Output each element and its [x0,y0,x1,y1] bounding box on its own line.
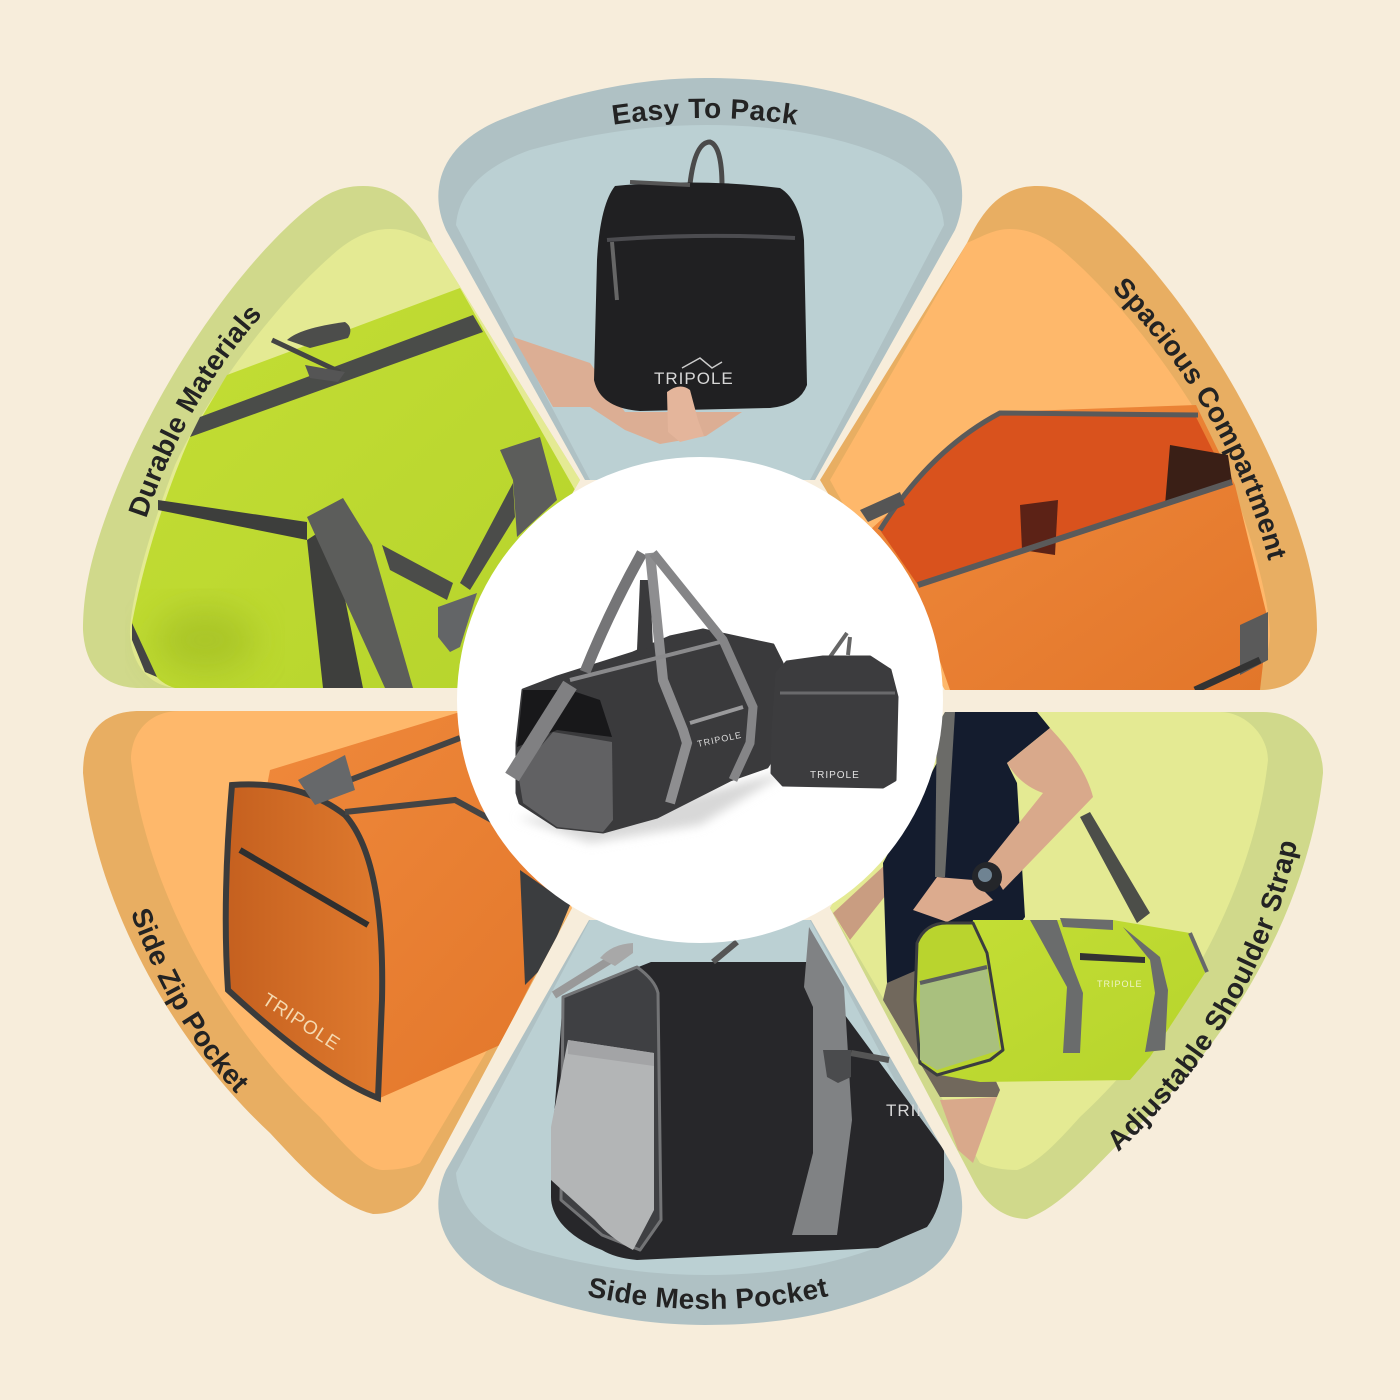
photo: orange duffel with side zip pocket [226,712,570,1098]
panel: Easy To Pack [438,78,962,480]
photo: packed pouch: TRIPOLE [810,770,860,781]
panel: Side Zip Pocket [83,711,572,1214]
label: Side Zip Pocket: Side Zip Pocket [132,908,248,1094]
photo: black duffel with side mesh pocket: TRIPOLE [886,1101,966,1120]
panel: Durable Materials [83,186,580,688]
center circle with product [457,457,943,943]
label: Side Mesh Pocket: Side Mesh Pocket [588,1278,828,1310]
photo: black duffel and packed pouch: TRIPOLE [696,730,743,749]
panel: Side Mesh Pocket [438,920,962,1325]
photo: man carrying lime duffel on shoulder strap: TRIPOLE [1097,979,1143,989]
photo: packed black pouch held in hand: TRIPOLE [654,369,734,388]
photo: black duffel and packed pouch [512,553,897,843]
label: Durable Materials: Durable Materials [128,308,260,517]
photo: man carrying lime duffel on shoulder strap [833,712,1207,1163]
label: Easy To Pack: Easy To Pack [612,98,798,125]
photo: packed black pouch held in hand [513,142,807,444]
photo: black duffel with side mesh pocket [551,927,966,1260]
photo: lime green duffel close up [132,288,575,688]
photo: orange duffel with side zip pocket: TRIPOLE [258,990,344,1055]
photo: packed pouch [772,633,897,787]
photo: open orange duffel [860,405,1268,690]
panel: Spacious Compartment [820,186,1317,690]
panel: Adjustable Shoulder Strap [830,712,1323,1219]
label: Adjustable Shoulder Strap: Adjustable Shoulder Strap [1110,842,1300,1152]
label: Spacious Compartment: Spacious Compartment [1114,278,1286,561]
